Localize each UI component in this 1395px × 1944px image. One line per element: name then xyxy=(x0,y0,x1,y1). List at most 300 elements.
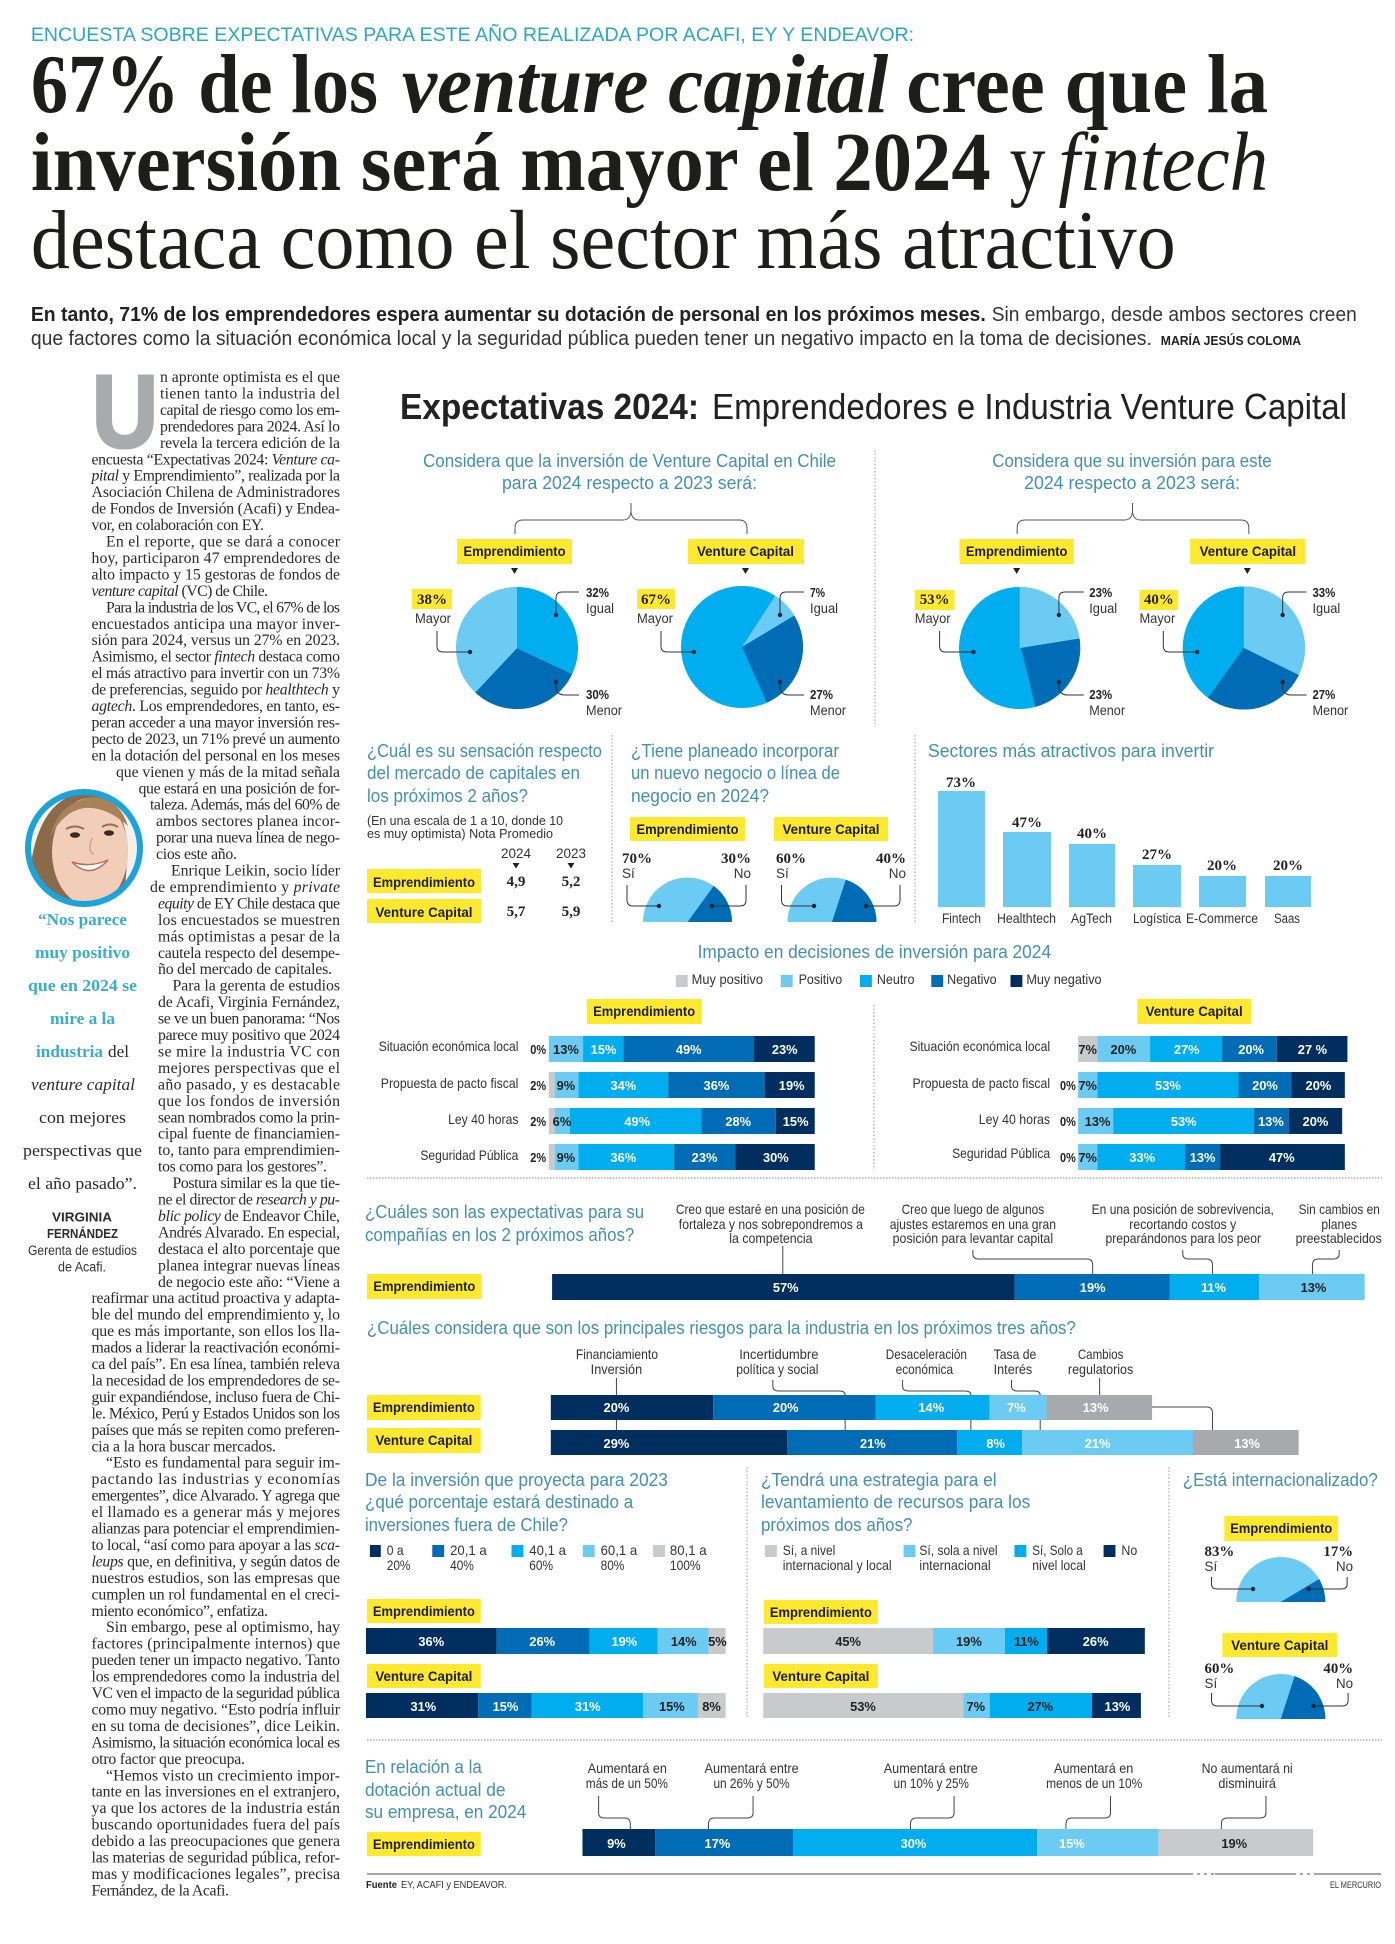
chart: Venture Capital: 7% xyxy=(1078,1042,1098,1057)
article body: en la dotación del personal en los meses xyxy=(92,747,340,764)
panel: mercado de capitales xyxy=(367,740,602,923)
option labels: fortaleza y nos sobrepondremos a xyxy=(679,1217,863,1232)
stacked bar: 13% xyxy=(1301,1280,1327,1295)
risk labels: Inversión xyxy=(591,1362,642,1377)
article body: que vienen y más de la mitad señala xyxy=(116,764,340,781)
panel: levantamiento de recursos xyxy=(761,1469,1145,1718)
article body: pueden tener un impacto negativo. Tanto xyxy=(92,1652,340,1669)
stacked bar: 17% xyxy=(705,1836,731,1851)
risk labels xyxy=(576,1347,1134,1377)
heading: ¿Tendrá una estrategia para el xyxy=(761,1469,997,1490)
pie: Emprendimiento: Mayor xyxy=(415,611,451,626)
pie: Emprendimiento: 23% xyxy=(1089,585,1113,600)
label: Emprendimiento: Emprendimiento xyxy=(770,1604,872,1620)
label: Venture Capital xyxy=(367,1428,481,1453)
article body: reafirmar una actitud proactiva y adapta- xyxy=(92,1290,340,1307)
pie: Venture Capital: 40% xyxy=(1144,592,1174,608)
option labels: disminuirá xyxy=(1218,1776,1276,1791)
article body: los encuestados se muestren xyxy=(158,912,340,929)
risk labels: Cambios xyxy=(1078,1347,1124,1362)
article body: otro factor que preocupa. xyxy=(92,1751,245,1768)
bar: Emprendimiento: 45% xyxy=(835,1634,861,1649)
gauge: Venture Capital: Venture Capital xyxy=(1231,1637,1328,1653)
article body: Asimismo, la situación económica local es xyxy=(92,1734,340,1751)
article body: alto impacto y 15 gestoras de fondos de xyxy=(92,566,340,583)
article body: peran acceder a una mayor inversión res- xyxy=(92,714,340,732)
pie: Venture Capital: 27% xyxy=(1312,687,1336,702)
label: Venture Capital: Venture Capital xyxy=(697,543,794,559)
heading: 2024 respecto a 2023 será: xyxy=(1024,472,1240,493)
pie: Emprendimiento: Igual xyxy=(1089,601,1117,616)
article body: ño del mercado de capitales. xyxy=(158,961,332,978)
pull quote: “Nos parece xyxy=(38,910,127,929)
panel: inversión VC en Chile xyxy=(412,450,846,718)
article body: destaca el alto porcentaje que xyxy=(158,1241,340,1258)
chart: Emprendimiento: 2% xyxy=(530,1150,547,1165)
bar: Emprendimiento: 19% xyxy=(956,1634,982,1649)
deck: En tanto, 71% de los emprendedores espera aumentar su dotación de personal en los próximos meses. xyxy=(31,304,986,326)
title: 67% de los xyxy=(31,38,378,131)
article body: “Esto es fundamental para seguir im- xyxy=(106,1455,340,1472)
article body: equity de EY Chile destaca que xyxy=(158,895,340,912)
article body: encuesta “Expectativas 2024: Venture ca- xyxy=(92,451,340,468)
label: Venture Capital: Venture Capital xyxy=(375,1432,472,1448)
bar: Venture Capital: 8% xyxy=(986,1436,1005,1451)
chart: Emprendimiento: Emprendimiento xyxy=(593,1003,695,1019)
article body: Fernández, de la Acafi. xyxy=(92,1882,229,1899)
article body: Para la industria de los VC, el 67% de los xyxy=(106,599,340,616)
risk labels: económica xyxy=(896,1362,954,1377)
gauge: Emprendimiento: 30% xyxy=(721,851,751,867)
bar: Venture Capital xyxy=(366,1693,726,1718)
heading: ¿Cuál es su sensación respecto xyxy=(367,740,602,761)
article body: cia a la hora buscar mercados. xyxy=(92,1438,276,1455)
categories: AgTech xyxy=(1071,911,1112,926)
bar: Emprendimiento xyxy=(763,1628,1145,1654)
option labels: Creo que estaré en una posición de xyxy=(676,1202,865,1217)
label: Emprendimiento: Emprendimiento xyxy=(373,1603,475,1619)
article body: to, tanto para emprendimien- xyxy=(158,1142,340,1159)
heading: ¿Cuáles considera que son los principales riesgos para la industria en los próximos tres años? xyxy=(367,1317,1076,1338)
article body: cumplen un rol fundamental en el creci- xyxy=(92,1586,340,1603)
legend: Muy positivo xyxy=(692,972,763,987)
gauge: Emprendimiento: Sí xyxy=(1205,1559,1217,1574)
gauge: Emprendimiento: Emprendimiento xyxy=(1230,1520,1332,1536)
gauge: Emprendimiento: No xyxy=(734,866,751,881)
chart: Emprendimiento: 30% xyxy=(763,1150,789,1165)
chart: Venture Capital: 53% xyxy=(1171,1114,1197,1129)
panel: su inversión xyxy=(915,450,1349,718)
legend xyxy=(676,972,1102,987)
article body: Para la gerenta de estudios xyxy=(172,978,340,995)
gauge: Venture Capital: Venture Capital xyxy=(782,821,880,837)
option labels: posición para levantar capital xyxy=(893,1231,1053,1246)
chart: Venture Capital: 7% xyxy=(1078,1150,1098,1165)
heading: Considera que su inversión para este xyxy=(992,450,1272,471)
pull quote: con mejores xyxy=(39,1108,126,1127)
heading xyxy=(992,450,1272,493)
gauge: Venture Capital: 40% xyxy=(1323,1661,1353,1677)
legend: Negativo xyxy=(947,972,997,987)
heading: los próximos 2 años? xyxy=(367,785,528,806)
legend: 40,1 a xyxy=(529,1543,566,1558)
bar: Emprendimiento: 26% xyxy=(529,1634,556,1649)
quote attribution: VIRGINIA xyxy=(52,1210,113,1224)
values: 20% xyxy=(1273,858,1303,874)
pull quote: el año pasado”. xyxy=(28,1174,137,1193)
option labels: más de un 50% xyxy=(586,1776,668,1791)
bar: Venture Capital: 7% xyxy=(967,1699,986,1714)
article body: Enrique Leikin, socio líder xyxy=(171,862,341,880)
heading: ¿Tiene planeado incorporar xyxy=(631,740,839,761)
kicker: ENCUESTA SOBRE EXPECTATIVAS PARA ESTE AÑO REALIZADA POR ACAFI, EY Y ENDEAVOR: xyxy=(31,24,914,46)
bar: Emprendimiento: 36% xyxy=(418,1634,445,1649)
values: 40% xyxy=(1077,826,1107,842)
legend: 60,1 a xyxy=(601,1543,638,1558)
chart: Venture Capital: 0% xyxy=(1060,1114,1076,1129)
chart: Emprendimiento: 6% xyxy=(553,1114,572,1129)
bar: Venture Capital: 27% xyxy=(1027,1699,1054,1714)
article body: leups que, en definitiva, y según datos de xyxy=(92,1553,340,1570)
score table: 2023 xyxy=(556,846,586,861)
article body: buscando oportunidades fuera del país xyxy=(92,1817,340,1834)
label: Venture Capital: Venture Capital xyxy=(772,1668,869,1684)
gauge: Venture Capital: No xyxy=(1336,1676,1353,1691)
article body: mas y modificaciones legales”, precisa xyxy=(92,1866,340,1883)
chart: Emprendimiento: Situación económica local xyxy=(379,1039,518,1054)
chart: Venture Capital: Propuesta de pacto fiscal xyxy=(912,1076,1050,1091)
panel: riesgos xyxy=(367,1317,1299,1455)
article body: capital de riesgo como los em- xyxy=(160,402,340,419)
label: Emprendimiento xyxy=(457,539,572,574)
bar: Venture Capital: 15% xyxy=(493,1699,519,1714)
score table xyxy=(367,846,586,923)
note: (En una escala de 1 a 10, donde 10 xyxy=(367,814,563,828)
article body: tos como para los gestores”. xyxy=(158,1159,327,1176)
score table: Venture Capital xyxy=(376,904,472,920)
chart: Emprendimiento: 2% xyxy=(530,1114,547,1129)
pie: Venture Capital: Mayor xyxy=(637,611,673,626)
categories: Saas xyxy=(1274,911,1300,926)
heading: Sectores más atractivos para invertir xyxy=(928,740,1214,761)
option labels: En una posición de sobrevivencia, xyxy=(1092,1202,1274,1217)
article body: de emprendimiento y private xyxy=(150,879,340,896)
bar: Venture Capital xyxy=(763,1693,1141,1718)
heading xyxy=(423,450,836,493)
article body: la necesidad de los emprendedores de se- xyxy=(92,1372,340,1390)
article body: de preferencias, seguido por healthtech y xyxy=(92,682,340,699)
article body: taleza. Además, más del 60% de xyxy=(150,797,340,814)
article body: pecto de 2023, un 71% prevé un aumento xyxy=(92,731,340,748)
title: inversión será mayor el 2024 xyxy=(31,116,991,209)
bar: Emprendimiento: 14% xyxy=(918,1400,945,1415)
option labels: la competencia xyxy=(729,1231,813,1246)
article body: blic policy de Endeavor Chile, xyxy=(158,1208,340,1225)
article body: cautela respecto del desempe- xyxy=(158,945,340,962)
article body: Asociación Chilena de Administradores xyxy=(92,484,340,501)
heading xyxy=(631,740,840,806)
option labels: No aumentará ni xyxy=(1202,1761,1293,1776)
gauge: Emprendimiento: 17% xyxy=(1323,1544,1353,1560)
article body: factores (principalmente internos) que xyxy=(92,1636,340,1653)
quote attribution: Gerenta de estudios xyxy=(28,1243,137,1258)
legend: 0 a xyxy=(387,1543,404,1558)
bar: Venture Capital: 8% xyxy=(702,1699,721,1714)
pull quote: mire a la xyxy=(50,1009,115,1028)
gauge: Emprendimiento: No xyxy=(1336,1559,1353,1574)
heading xyxy=(367,740,602,806)
pull quote: industria xyxy=(36,1042,103,1061)
gauge: Emprendimiento xyxy=(1205,1516,1353,1602)
option labels xyxy=(676,1202,1382,1246)
pie: Venture Capital: Igual xyxy=(810,601,838,616)
bar: Emprendimiento: 20% xyxy=(604,1400,630,1415)
label: Emprendimiento xyxy=(367,1832,481,1856)
title: venture capital xyxy=(402,38,889,131)
heading: De la inversión que proyecta para 2023 xyxy=(365,1469,668,1490)
legend: 20% xyxy=(387,1558,411,1573)
heading: inversiones fuera de Chile? xyxy=(365,1514,568,1535)
article body: emergentes”, dice Alvarado. Y agrega que xyxy=(92,1488,340,1505)
score table: 5,9 xyxy=(562,904,580,920)
chart: Emprendimiento: 0% xyxy=(530,1042,547,1057)
legend: Positivo xyxy=(799,972,842,987)
legend: nivel local xyxy=(1032,1558,1086,1573)
option labels: Aumentará entre xyxy=(884,1761,978,1776)
label: Emprendimiento xyxy=(367,1274,482,1299)
stacked bar: 30% xyxy=(901,1836,927,1851)
chart: Venture Capital: Situación económica local xyxy=(910,1039,1050,1054)
risk labels: política y social xyxy=(736,1362,818,1377)
chart: Venture Capital: 20% xyxy=(1110,1042,1137,1057)
article body: tante en las inversiones en el extranjero, xyxy=(92,1784,340,1801)
legend xyxy=(765,1543,1137,1573)
article body: nuestros estudios, son las empresas que xyxy=(92,1570,340,1587)
option labels: menos de un 10% xyxy=(1046,1776,1142,1791)
chart: Venture Capital xyxy=(910,999,1347,1170)
article body: revela la tercera edición de la xyxy=(160,435,340,452)
legend: 100% xyxy=(670,1558,701,1573)
article body: Asimismo, el sector fintech destaca como xyxy=(92,649,340,666)
bar: Emprendimiento xyxy=(551,1395,1152,1420)
article body: en su toma de decisiones”, dice Leikin. xyxy=(92,1718,340,1735)
article body: Postura similar es la que tie- xyxy=(172,1175,340,1192)
article body: mejores perspectivas que el xyxy=(158,1060,341,1077)
article body: vor, en colaboración con EY. xyxy=(92,517,264,534)
bar: Emprendimiento: 5% xyxy=(708,1634,727,1649)
categories: Healthtech xyxy=(997,911,1056,926)
heading: su empresa, en 2024 xyxy=(365,1801,526,1822)
chart: Venture Capital: 0% xyxy=(1060,1150,1076,1165)
heading: un nuevo negocio o línea de xyxy=(631,762,840,783)
chart: Venture Capital: 20% xyxy=(1306,1078,1332,1093)
stacked bar xyxy=(552,1274,1365,1300)
chart: Venture Capital: 0% xyxy=(1060,1078,1076,1093)
label: Emprendimiento: Emprendimiento xyxy=(373,1836,475,1852)
option labels: un 10% y 25% xyxy=(894,1776,969,1791)
gauge: Venture Capital: No xyxy=(889,866,906,881)
score table: Emprendimiento xyxy=(373,874,475,890)
values: 47% xyxy=(1012,815,1042,831)
article body: más optimistas a pesar de la xyxy=(158,928,340,945)
option labels: un 26% y 50% xyxy=(713,1776,790,1791)
label: Venture Capital xyxy=(1190,539,1306,574)
chart: Venture Capital: 47% xyxy=(1269,1150,1295,1165)
pie: Emprendimiento xyxy=(412,585,622,718)
quote attribution: FERNÁNDEZ xyxy=(47,1226,118,1241)
categories xyxy=(942,911,1300,926)
pie: Venture Capital: 33% xyxy=(1312,585,1336,600)
categories: Fintech xyxy=(942,911,981,926)
legend: Sí, Solo a xyxy=(1032,1543,1083,1558)
chart: Venture Capital: 20% xyxy=(1238,1042,1264,1057)
heading: ¿qué porcentaje estará destinado a xyxy=(365,1491,634,1512)
deck: que factores como la situación económica local y la seguridad pública pueden tener un negativo impacto en la toma de decisiones. xyxy=(31,328,1152,350)
article body: cios este año. xyxy=(156,846,237,863)
gauge: Venture Capital: Sí xyxy=(776,866,789,881)
risk labels: Financiamiento xyxy=(576,1347,658,1362)
chart: Emprendimiento: 23% xyxy=(692,1150,718,1165)
quote attribution xyxy=(28,1210,137,1274)
legend xyxy=(370,1543,707,1573)
heading: próximos dos años? xyxy=(761,1514,912,1535)
pie: Emprendimiento: 38% xyxy=(417,592,447,608)
bar chart: sectores xyxy=(928,740,1311,926)
chart: Venture Capital: 27 % xyxy=(1298,1042,1328,1057)
label: Emprendimiento: Emprendimiento xyxy=(966,543,1067,559)
chart: Emprendimiento: Ley 40 horas xyxy=(448,1112,519,1127)
chart: Venture Capital: 20% xyxy=(1252,1078,1278,1093)
chart: Venture Capital: 27% xyxy=(1174,1042,1200,1057)
gauge: Emprendimiento xyxy=(622,817,751,922)
source: Fuente xyxy=(366,1880,397,1891)
article body: hoy, participaron 47 emprendedores de xyxy=(92,550,340,567)
title: destaca como el sector más atractivo xyxy=(31,194,1176,287)
bars xyxy=(938,791,1311,907)
chart: Emprendimiento: 2% xyxy=(530,1078,547,1093)
article body: prendedores para 2024. Así lo xyxy=(160,418,340,435)
values: 73% xyxy=(946,775,976,791)
heading xyxy=(365,1469,668,1535)
bar: Venture Capital: 53% xyxy=(850,1699,876,1714)
legend: Muy negativo xyxy=(1026,972,1102,987)
categories: E-Commerce xyxy=(1186,911,1258,926)
heading: ¿Cuáles son las expectativas para su xyxy=(365,1201,644,1222)
gauge: Emprendimiento: Emprendimiento xyxy=(636,821,738,837)
leader lines xyxy=(616,1378,1212,1430)
chart: Emprendimiento: 28% xyxy=(725,1114,752,1129)
score table: 5,7 xyxy=(507,904,526,920)
article body: se ve un buen panorama: “Nos xyxy=(158,1011,340,1028)
note: es muy optimista) Nota Promedio xyxy=(367,827,553,841)
stacked bar: 19% xyxy=(1080,1280,1106,1295)
bracket xyxy=(1017,503,1249,534)
pie: Emprendimiento: 30% xyxy=(586,687,609,702)
article body: ca del país”. En esa línea, también releva xyxy=(92,1356,340,1373)
pie: Emprendimiento xyxy=(915,585,1126,718)
pie: Emprendimiento: 53% xyxy=(920,592,950,608)
chart: Emprendimiento: 15% xyxy=(591,1042,617,1057)
heading xyxy=(365,1756,526,1822)
portrait xyxy=(28,792,140,906)
pie: Venture Capital: Igual xyxy=(1312,601,1340,616)
score table: 5,2 xyxy=(562,874,580,890)
gauge: Venture Capital xyxy=(774,817,906,922)
chart: Venture Capital: 13% xyxy=(1190,1150,1216,1165)
stacked bar: 9% xyxy=(607,1836,626,1851)
article body: En el reporte, que se dará a conocer xyxy=(106,534,341,550)
article body: que estará en una posición de for- xyxy=(138,780,340,797)
panel: nuevo negocio xyxy=(622,740,906,922)
legend: 40% xyxy=(450,1558,474,1573)
article body: se mire la industria VC con xyxy=(158,1044,340,1060)
bar: Venture Capital: 21% xyxy=(860,1436,886,1451)
pull quote: que en 2024 se xyxy=(28,976,137,995)
article body: las materias de seguridad pública, refor- xyxy=(92,1850,340,1866)
bar: Emprendimiento: 7% xyxy=(1007,1400,1026,1415)
heading xyxy=(365,1201,644,1245)
panel: expectativas compañías xyxy=(365,1201,1382,1300)
risk labels: Desaceleración xyxy=(886,1347,967,1362)
chart: Emprendimiento: 36% xyxy=(610,1150,637,1165)
bar: Emprendimiento: 14% xyxy=(671,1634,697,1649)
article body: tienen tanto la industria del xyxy=(160,386,341,402)
article body: pital y Emprendimiento”, realizada por la xyxy=(90,468,340,485)
legend: internacional xyxy=(919,1558,991,1573)
score table: 2024 xyxy=(501,846,532,861)
section heading: Expectativas 2024: xyxy=(400,386,699,427)
option labels: Sin cambios en xyxy=(1299,1202,1380,1217)
deck: MARÍA JESÚS COLOMA xyxy=(1161,333,1301,348)
heading: levantamiento de recursos para los xyxy=(761,1491,1030,1512)
pull quote: del xyxy=(108,1042,129,1061)
article body: encuestados anticipa una mayor inver- xyxy=(92,616,340,633)
heading xyxy=(761,1469,1030,1535)
chart: Emprendimiento: 49% xyxy=(676,1042,702,1057)
label: Emprendimiento xyxy=(367,1395,481,1420)
label: Emprendimiento: Emprendimiento xyxy=(373,1399,475,1415)
label: Emprendimiento: Emprendimiento xyxy=(373,1278,475,1294)
option labels: Creo que luego de algunos xyxy=(902,1202,1044,1217)
article body: to local, “así como para apoyar a las sca- xyxy=(92,1537,340,1554)
stacked bar: 57% xyxy=(773,1280,799,1295)
chart: Venture Capital: 20% xyxy=(1303,1114,1329,1129)
pull quote: perspectivas que xyxy=(23,1141,142,1160)
article body: de Fondos de Inversión (Acafi) y Endea- xyxy=(92,501,340,518)
legend: internacional y local xyxy=(783,1558,892,1573)
chart: Venture Capital: 13% xyxy=(1258,1114,1284,1129)
panel: impacto en decisiones xyxy=(379,941,1347,1170)
heading: del mercado de capitales en xyxy=(367,762,580,783)
article body: de Acafi, Virginia Fernández, xyxy=(158,994,340,1011)
credit: EL MERCURIO xyxy=(1330,1880,1381,1891)
bar: Emprendimiento: 20% xyxy=(773,1400,799,1415)
article body: alianzas para potenciar el emprendimien- xyxy=(92,1520,340,1538)
pie: Venture Capital: 67% xyxy=(641,592,671,608)
article body: VC ven el impacto de la seguridad pública xyxy=(92,1685,340,1702)
source: EY, ACAFI y ENDEAVOR. xyxy=(401,1880,507,1891)
bar: Emprendimiento: 13% xyxy=(1083,1400,1109,1415)
chart: Emprendimiento xyxy=(379,999,815,1170)
gauge: Venture Capital: Sí xyxy=(1205,1676,1217,1691)
heading: Considera que la inversión de Venture Capital en Chile xyxy=(423,450,836,471)
label: Venture Capital xyxy=(688,539,804,574)
label: Venture Capital: Venture Capital xyxy=(1200,543,1296,559)
legend: 80,1 a xyxy=(670,1543,707,1558)
heading: compañías en los 2 próximos años? xyxy=(365,1224,634,1245)
pie: Venture Capital: 7% xyxy=(810,585,825,600)
risk labels: Tasa de xyxy=(994,1347,1036,1362)
